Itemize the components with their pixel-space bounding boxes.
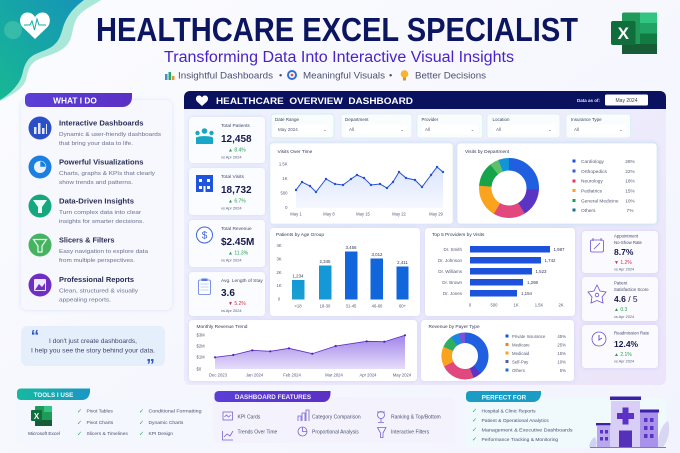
item: professional reports: appealing reports.	[59, 298, 111, 304]
chart: top 5 providers: 1,523	[536, 269, 547, 274]
checklist: tool features: ✓	[139, 420, 144, 426]
checklist: tool features	[77, 408, 202, 438]
checklist: tool features: ✓	[77, 420, 82, 426]
heading: what I do	[25, 93, 132, 107]
legend: departments: General Medicine	[581, 198, 619, 204]
filter: provider: Provider	[422, 117, 439, 122]
filter: department: ⌄	[400, 127, 404, 132]
KPI card: patient satisfaction score	[582, 277, 658, 321]
panel: dashboard	[184, 91, 666, 385]
KPI card: total patients: ▲ 8.4%	[228, 148, 246, 154]
legend: payer types: 5%	[560, 368, 566, 373]
item: powerful visualizations: show trends and patterns.	[59, 180, 133, 186]
KPI card: average length of stay	[189, 272, 265, 316]
KPI card: readmission rate: 12.4%	[614, 339, 639, 349]
chart: revenue by payer type: Revenue by Payer Type	[428, 324, 480, 330]
chart: visits by department donut: Visits by Department	[465, 149, 510, 155]
KPI card: appointment no-show rate: Appointment	[614, 234, 639, 238]
item: professional reports: Clean, structured & visually	[59, 288, 138, 294]
checklist: tool features: ✓	[139, 409, 144, 415]
KPI card: total patients: vs Apr 2024	[221, 154, 242, 160]
item: data-driven insights	[28, 194, 144, 225]
KPI card: appointment no-show rate: No-Show Rate	[614, 240, 643, 245]
item: interactive dashboards: Interactive Dashboards	[59, 118, 144, 128]
chart: top 5 providers: 500	[490, 302, 498, 308]
legend: payer types: 15%	[557, 351, 566, 356]
chart: monthly revenue trend: $2M	[196, 344, 205, 348]
checklist: use cases: ✓	[472, 428, 477, 434]
KPI card: appointment no-show rate: ▼ 1.2%	[614, 260, 632, 266]
checklist: tool features: Conditional Formatting	[148, 408, 202, 414]
chart: visits over time: 0	[285, 205, 288, 210]
feature labels: Category Comparison	[312, 414, 361, 420]
callout: quote: ”	[146, 356, 155, 374]
chart: patients by age group: 31-45	[346, 304, 357, 308]
filter: department: Department	[345, 117, 369, 122]
item: slicers and filters	[28, 234, 149, 264]
KPI card: total revenue: $2.45M	[221, 237, 254, 248]
chart: patients by age group: 3,456	[346, 245, 357, 250]
chart: monthly revenue trend: Dec 2023	[209, 372, 228, 378]
dashboard header bar: Data as of:	[577, 98, 601, 103]
KPI card: average length of stay: ▼ 5.2%	[228, 301, 246, 307]
chart: patients by age group: 3,012	[372, 252, 383, 257]
chart: patients by age group: Patients by Age Group	[276, 232, 324, 238]
checklist: use cases: ✓	[472, 408, 477, 414]
KPI card: readmission rate: vs Apr 2024	[614, 360, 634, 364]
KPI card: total patients	[189, 117, 265, 163]
heading: tools I use	[17, 388, 90, 400]
chart: visits over time: 1K	[282, 176, 288, 181]
chart: top 5 providers: Dr. Johnson	[438, 258, 462, 263]
checklist: tool features: KPI Design	[148, 431, 173, 437]
KPI card: average length of stay: vs Apr 2024	[221, 308, 242, 313]
title: HEALTHCARE EXCEL SPECIALIST	[96, 11, 578, 48]
filter: insurance type: All	[574, 127, 579, 132]
filter row	[271, 114, 630, 138]
icon: Excel logo: X	[618, 24, 630, 43]
chart: monthly revenue trend: Monthly Revenue Trend	[196, 324, 248, 330]
chart: visits over time: May 15	[356, 212, 371, 216]
item: slicers and filters: Easy navigation to explore data	[59, 249, 149, 255]
KPI card: patient satisfaction score: Satisfaction Score	[614, 287, 649, 292]
KPI card: total patients: Total Patients	[221, 123, 250, 129]
callout: quote: I help you see the story behind your data.	[31, 348, 155, 354]
item: data-driven insights: insights for smarter decisions.	[59, 219, 144, 225]
tagline row: •	[389, 70, 392, 80]
filter: location: ⌄	[548, 127, 552, 132]
legend: departments: 28%	[625, 159, 636, 165]
feature labels: Ranking & Top/Bottom	[391, 414, 441, 420]
legend: payer types	[506, 334, 566, 373]
filter: location	[487, 114, 560, 138]
checklist: use cases: Management & Executive Dashboards	[482, 427, 573, 433]
legend: departments: Cardiology	[581, 159, 605, 165]
KPI card: total visits	[189, 168, 265, 215]
KPI card: total revenue: $	[202, 230, 208, 242]
decorative corner wave with heart logo	[0, 0, 101, 101]
legend: departments: Neurology	[581, 178, 603, 184]
KPI card: readmission rate: Readmission Rate	[614, 330, 650, 336]
item: interactive dashboards: that bring your data to life.	[59, 141, 133, 147]
callout: quote: “	[31, 326, 39, 346]
icon: Excel logo	[611, 12, 657, 54]
chart: monthly revenue trend: Jan 2024	[246, 372, 264, 378]
icon: Microsoft Excel: Microsoft Excel	[28, 431, 60, 436]
chart: visits over time	[270, 143, 453, 224]
item: interactive dashboards	[28, 116, 161, 147]
checklist: tool features: Pivot Tables	[86, 408, 113, 414]
filter: date range	[271, 114, 334, 138]
heading: perfect for: PERFECT FOR	[482, 394, 527, 401]
filter: provider: All	[425, 127, 430, 132]
legend: departments: Others	[581, 208, 596, 214]
KPI card: average length of stay: Avg. Length of Stay	[221, 278, 263, 284]
chart: patients by age group: 0	[278, 296, 281, 302]
chart: top 5 providers: 1K	[513, 302, 519, 308]
chart: top 5 providers: Dr. Jones	[443, 291, 463, 296]
chart: top 5 providers: 2K	[558, 302, 564, 308]
checklist: use cases: Performance Tracking & Monitoring	[482, 437, 558, 443]
filter: department: All	[349, 127, 354, 132]
chart: visits over time: 500	[280, 190, 288, 196]
chart: revenue by payer type	[421, 320, 574, 382]
tagline row: Better Decisions	[415, 70, 486, 80]
panel: tools I use	[16, 388, 207, 443]
chart: top 5 providers: 1,154	[521, 291, 533, 296]
tagline row: Meaningful Visuals	[303, 70, 385, 80]
item: interactive dashboards: Dynamic & user-friendly dashboards	[59, 132, 161, 138]
chart: monthly revenue trend: $1M	[196, 354, 205, 360]
legend: departments: 7%	[627, 208, 634, 214]
KPI card: appointment no-show rate: 8.7%	[614, 247, 634, 257]
chart: patients by age group: 1K	[276, 283, 282, 288]
chart: patients by age group: 60+	[399, 304, 407, 308]
checklist: tool features: ✓	[77, 432, 82, 438]
heading: what I do: WHAT I DO	[53, 96, 97, 106]
KPI card: patient satisfaction score: vs Apr 2024	[614, 315, 634, 319]
legend: payer types: Private Insurance	[512, 334, 546, 339]
icon: Microsoft Excel	[28, 406, 60, 436]
checklist: use cases: ✓	[472, 437, 477, 443]
feature labels	[238, 414, 441, 436]
chart: top 5 providers: 1.5K	[535, 302, 544, 308]
legend: payer types: Self-Pay	[512, 359, 529, 364]
filter: date range: Date Range	[275, 117, 300, 122]
chart: top 5 providers: 1,298	[527, 280, 539, 285]
chart: top 5 providers: Dr. Smith	[443, 247, 462, 252]
chart: monthly revenue trend: Apr 2024	[360, 372, 377, 378]
KPI card: total revenue	[189, 220, 265, 267]
legend: departments: Pediatrics	[581, 188, 603, 194]
filter: provider	[417, 114, 482, 138]
filter: insurance type	[566, 114, 630, 138]
filter: department	[341, 114, 412, 138]
filter: location: Location	[492, 117, 510, 122]
KPI card: total visits: Total Visits	[221, 174, 244, 180]
chart: visits over time: May 22	[392, 212, 407, 216]
tagline row: •	[279, 70, 282, 80]
heading: dashboard features	[214, 391, 330, 402]
KPI card: patient satisfaction score: 4.6 / 5	[614, 294, 638, 304]
legend: departments: 15%	[625, 188, 636, 194]
checklist: tool features: Dynamic Charts	[148, 420, 184, 426]
checklist: use cases	[472, 408, 573, 443]
feature labels: Interactive Filters	[391, 430, 430, 436]
dashboard header bar: May 2024	[616, 98, 638, 104]
legend: departments	[572, 159, 636, 214]
filter: insurance type: Insurance Type	[571, 117, 602, 122]
chart: patients by age group: 4K	[276, 243, 282, 248]
checklist: tool features: ✓	[77, 409, 82, 415]
KPI card: total patients: 12,458	[221, 134, 252, 145]
chart: visits over time: May 8	[323, 212, 335, 216]
filter: provider: ⌄	[471, 127, 475, 132]
checklist: tool features: Pivot Charts	[86, 420, 114, 426]
subtitle: Transforming Data Into Interactive Visual Insights	[164, 49, 514, 66]
feature icons	[222, 410, 386, 440]
chart: monthly revenue trend	[189, 320, 417, 381]
dashboard header bar: HEALTHCARE OVERVIEW DASHBOARD	[216, 96, 413, 106]
chart: patients by age group: 18-30	[320, 304, 331, 308]
chart: monthly revenue trend: $0	[196, 366, 202, 372]
chart: top 5 providers: 0	[469, 302, 472, 308]
legend: payer types: 25%	[557, 342, 566, 347]
item: powerful visualizations: Charts, graphs & KPIs that clearly	[59, 171, 155, 177]
chart: visits over time: 1.5K	[279, 162, 288, 166]
chart: visits over time: May 1	[290, 212, 302, 216]
callout: quote: I don't just create dashboards,	[49, 339, 137, 345]
feature labels: KPI Cards	[238, 414, 261, 420]
chart: top 5 providers: Dr. Williams	[438, 269, 463, 274]
chart: monthly revenue trend: $3M	[196, 332, 205, 338]
chart: patients by age group	[270, 228, 420, 316]
checklist: use cases: Patient & Operational Analytics	[482, 418, 549, 424]
item: slicers and filters: from multiple perspectives.	[59, 258, 135, 264]
KPI card: total revenue: ▲ 11.3%	[228, 250, 249, 256]
filter: insurance type: ⌄	[619, 127, 623, 132]
chart: patients by age group: 3K	[276, 256, 282, 262]
dashboard header bar	[184, 91, 666, 109]
legend: departments: 22%	[625, 169, 636, 175]
checklist: use cases: Hospital & Clinic Reports	[482, 408, 536, 414]
item: powerful visualizations	[28, 156, 155, 186]
filter: location: All	[496, 127, 501, 132]
legend: departments: Orthopedics	[581, 169, 607, 175]
KPI card: total visits: 18,732	[221, 185, 252, 196]
tagline row	[165, 70, 486, 80]
legend: payer types: Medicaid	[512, 351, 530, 356]
KPI card: total revenue: Total Revenue	[221, 226, 252, 232]
feature labels: Trends Over Time	[238, 430, 278, 436]
panel: dashboard features	[213, 391, 455, 443]
panel: what I do	[21, 93, 172, 310]
KPI card: patient satisfaction score: Patient	[614, 280, 628, 286]
chart: top 5 providers	[425, 228, 575, 316]
filter: date range: ⌄	[323, 127, 327, 132]
chart: visits by department donut	[457, 143, 657, 224]
item: professional reports	[28, 274, 138, 304]
chart: top 5 providers: Top 5 Providers by Visits	[432, 232, 485, 238]
tagline row: Insightful Dashboards	[178, 70, 273, 80]
item: data-driven insights: Data-Driven Insights	[59, 196, 134, 206]
chart: patients by age group: 1,234	[292, 274, 304, 278]
legend: departments: 10%	[625, 198, 636, 204]
KPI card: total revenue: vs Apr 2024	[221, 258, 242, 262]
legend: payer types: 10%	[557, 359, 566, 364]
KPI card: appointment no-show rate	[582, 231, 658, 273]
KPI card: total visits: ▲ 6.7%	[228, 198, 246, 204]
chart: visits over time: Visits Over Time	[278, 149, 313, 155]
heading: dashboard features: DASHBOARD FEATURES	[235, 394, 311, 401]
chart: patients by age group: 46-60	[372, 304, 383, 308]
chart: monthly revenue trend: Feb 2024	[283, 372, 302, 378]
KPI card: average length of stay: 3.6	[221, 288, 235, 299]
chart: monthly revenue trend: May 2024	[393, 372, 412, 378]
KPI card: total visits: vs Apr 2024	[221, 206, 242, 210]
callout: quote	[21, 326, 165, 374]
item: slicers and filters: Slicers & Filters	[59, 236, 114, 244]
item: powerful visualizations: Powerful Visualizations	[59, 158, 144, 166]
KPI card: patient satisfaction score: ▲ 0.3	[614, 307, 628, 313]
chart: patients by age group: 2,411	[397, 260, 408, 265]
chart: visits over time: May 29	[429, 212, 444, 216]
KPI card: appointment no-show rate: vs Apr 2024	[614, 268, 634, 272]
chart: patients by age group: <18	[294, 304, 302, 308]
chart: patients by age group: 2K	[276, 270, 282, 275]
item: professional reports: Professional Reports	[59, 275, 134, 284]
chart: top 5 providers: 1,987	[554, 247, 565, 252]
legend: payer types: 45%	[557, 334, 566, 339]
chart: patients by age group: 2,345	[320, 259, 331, 264]
feature labels: Proportional Analysis	[312, 430, 359, 436]
icon: hospital building	[589, 396, 669, 448]
filter: date range: May 2024	[278, 127, 298, 132]
checklist: tool features: Slicers & Timelines	[86, 431, 128, 437]
heading: perfect for	[466, 391, 541, 402]
legend: payer types: Others	[512, 368, 525, 373]
checklist: tool features: ✓	[139, 432, 144, 438]
checklist: use cases: ✓	[472, 418, 477, 424]
legend: departments: 18%	[625, 178, 636, 184]
chart: top 5 providers: 1,742	[544, 258, 556, 263]
chart: top 5 providers: Dr. Brown	[442, 280, 462, 285]
legend: payer types: Medicare	[512, 342, 530, 347]
icon: Microsoft Excel: X	[34, 412, 40, 421]
chart: monthly revenue trend: Mar 2024	[325, 372, 344, 378]
panel: perfect for	[465, 391, 669, 448]
heading: tools I use: TOOLS I USE	[34, 392, 73, 399]
KPI card: readmission rate	[582, 325, 658, 368]
KPI card: readmission rate: ▲ 2.1%	[614, 352, 632, 358]
item: data-driven insights: Turn complex data into clear	[59, 210, 141, 216]
